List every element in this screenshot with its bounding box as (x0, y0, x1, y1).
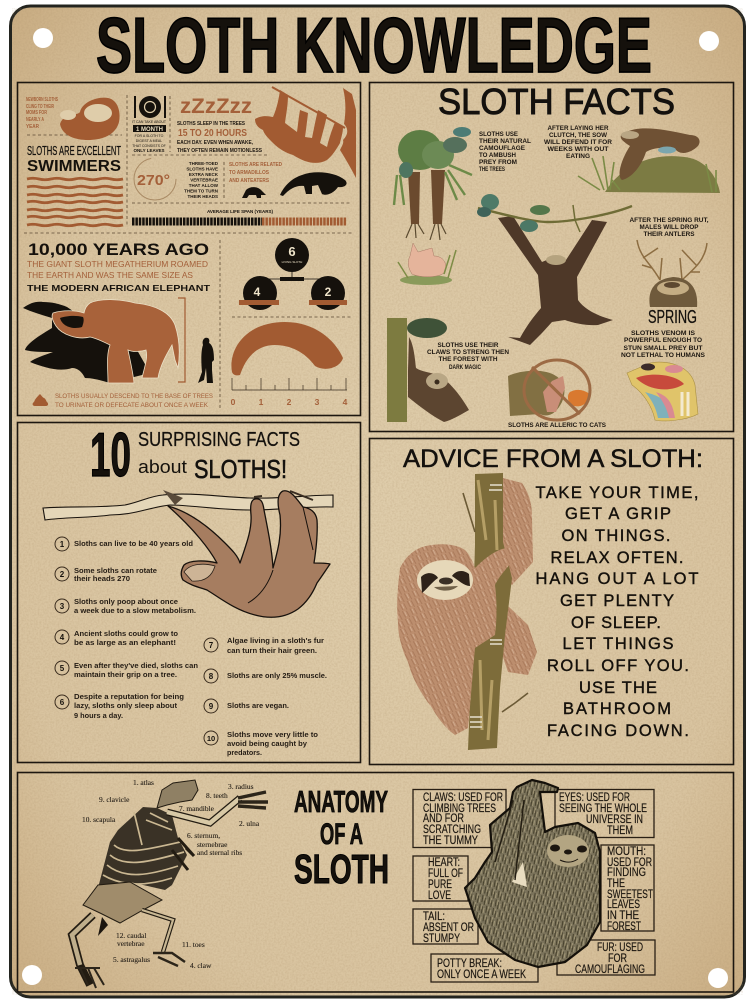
fact 6: Despite a reputation for being (74, 692, 184, 701)
illustration: elephant silhouette (52, 300, 179, 383)
text: newborn sloths: CLING TO THEIR (26, 104, 54, 110)
text: newborn sloths: YEAR (26, 124, 39, 130)
fact 4: Ancient sloths could grow to (74, 629, 178, 638)
heading: advice from a sloth: ADVICE FROM A SLOTH: (403, 445, 703, 473)
chart: species tree: 4 (254, 285, 261, 299)
claw tail (98, 917, 108, 936)
text: zzz sleep: zZzZzz (180, 95, 252, 118)
callout: claws: AND FOR (423, 813, 464, 825)
callout: mouth: IN THE (607, 910, 639, 922)
icon: armadillo (242, 187, 266, 198)
fact 3: a week due to a slow metabolism. (74, 606, 196, 615)
left hind leg (72, 915, 93, 985)
callout: potty break: POTTY BREAK: (437, 958, 502, 970)
text: neck vertebrae: SLOTHS HAVE (186, 166, 218, 172)
fact 9: Sloths are vegan. (227, 701, 289, 710)
callout: eyes: SEEING THE WHOLE (559, 803, 647, 815)
text: camouflage: THE TREES (479, 167, 505, 173)
text: one month to digest: FOR A SLOTH TO (135, 134, 164, 138)
skull (157, 780, 198, 808)
fact 1: Sloths can live to be 40 years old (74, 539, 193, 548)
text: sloth venom: SLOTHS VENOM IS (631, 331, 695, 337)
labels: skeleton parts: 7. mandible (179, 804, 215, 813)
illustration: sloth on tree (387, 318, 469, 422)
labels: skeleton parts: and sternal ribs (197, 848, 242, 857)
callout: heart: FULL OF (428, 868, 463, 880)
callout: fur: FUR: USED (597, 942, 643, 954)
text: related to armadillos (229, 162, 282, 184)
heading: swimmers (27, 143, 121, 175)
fact 7: 7 (209, 641, 214, 650)
fact 2: their heads 270 (74, 574, 130, 583)
callout: eyes: UNIVERSE IN (586, 814, 643, 826)
fact 5: Even after they've died, sloths can (74, 661, 198, 670)
claws (470, 485, 502, 727)
caption: allergic to cats: SLOTHS ARE ALLERIC TO CATS (508, 422, 606, 429)
text: newborn sloths: MOMS FOR (26, 110, 47, 116)
callout: claws: SCRATCHING (423, 824, 481, 836)
text: newborn sloths: NEWBORN SLOTHS (26, 97, 58, 103)
illustration: central hanging sloth (477, 194, 632, 345)
sloth body (397, 544, 512, 735)
heading: 10 surprising facts about sloths: SURPRISING FACTS (138, 429, 300, 451)
callout: heart: LOVE (428, 890, 451, 902)
height bracket (178, 298, 185, 382)
labels: skeleton parts: 5. astragalus (113, 955, 150, 964)
chart: 270 degree rotation: 270° (137, 172, 170, 189)
text: defending clutch: WILL DEFEND IT FOR (544, 140, 613, 146)
illustration: sloth skeleton (72, 780, 268, 988)
text: dropped antlers (630, 218, 709, 238)
hand (238, 792, 268, 808)
text: toilet habit: TO URINATE OR DEFECATE ABOUT ONCE A WEEK (55, 402, 209, 409)
list: facts 1 to 6 (55, 537, 198, 720)
text: defending clutch: WEEKS WITH OUT (548, 147, 609, 153)
text: advice list: FACING DOWN. (547, 722, 689, 740)
text: zzz sleep: THEY OFTEN REMAIN MOTIONLESS (177, 148, 262, 154)
text: one month to digest: IT CAN TAKE ABOUT (132, 120, 167, 124)
text: defending clutch: EATING (566, 154, 590, 160)
text: toilet habit: SLOTHS USUALLY DESCEND TO THE BASE OF TREES (55, 393, 214, 400)
text: advice list: BATHROOM (563, 700, 671, 718)
fact 7: Algae living in a sloth's fur (227, 636, 324, 645)
dashed dividers (24, 95, 352, 410)
labels: skeleton parts: 10. scapula (82, 815, 116, 824)
text: newborn sloths (26, 97, 58, 130)
fact 10: 10 (207, 734, 215, 743)
text: dropped antlers: AFTER THE SPRING RUT, (630, 218, 709, 224)
labels: skeleton parts: 1. atlas (133, 778, 154, 787)
callout: mouth: SWEETEST (607, 889, 653, 901)
callout: mouth: MOUTH: (607, 846, 646, 858)
fact 9: 9 (209, 702, 214, 711)
right hind leg (142, 910, 173, 952)
illustration: claw with ruler: 0 (231, 397, 236, 407)
text: neck vertebrae: THREE-TOED (189, 161, 219, 166)
icon: mother sloth and baby (60, 98, 120, 140)
chart: 270 degree rotation (134, 158, 176, 200)
heading: 10,000 years ago (27, 240, 211, 293)
callout: tail (423, 911, 474, 945)
fact 1 (55, 537, 193, 551)
labels: skeleton parts: 4. claw (190, 961, 212, 970)
fact 6 (55, 692, 184, 720)
text: advice list: RELAX OFTEN. (550, 549, 684, 567)
chart: average life span: AVERAGE LIFE SPAN (YEARS) (207, 209, 274, 214)
fact 9 (204, 699, 289, 713)
text: camouflage: THEIR NATURAL (479, 139, 531, 145)
callout: fur: FOR (608, 953, 627, 965)
text: neck vertebrae: VERTEBRAE (190, 178, 218, 182)
callout: mouth: FOREST (607, 921, 641, 933)
labels: skeleton parts: 3. radius (228, 782, 254, 791)
callout: heart: PURE (428, 879, 452, 891)
callout: heart: HEART: (428, 857, 460, 869)
heading: anatomy of a sloth: SLOTH (294, 846, 389, 892)
text: defending clutch (544, 126, 613, 160)
fact 10 (204, 730, 318, 757)
fact 7: can turn their hair green. (227, 646, 317, 655)
icon: poop (33, 394, 48, 406)
text: neck vertebrae: THEIR HEADS (187, 194, 218, 199)
icon: hanging sloth (255, 87, 356, 178)
fact 6: 6 (60, 698, 65, 707)
icon: plate and cutlery (134, 96, 166, 118)
text: advice list: LET THINGS (562, 635, 674, 653)
chart: species tree: LIVING SLOTH (282, 260, 302, 264)
text: advice list: OF SLEEP. (571, 614, 661, 632)
text: sloth venom: STUN SMALL PREY BUT (624, 346, 703, 352)
heading: swimmers: SWIMMERS (27, 158, 121, 175)
panel: 10 surprising facts (18, 421, 360, 762)
chart: species tree: 6 (288, 244, 296, 259)
illustration: pig (398, 243, 456, 285)
callout: eyes: THEM (607, 825, 633, 837)
back leg (500, 605, 537, 675)
text: dark magic: DARK MAGIC (449, 365, 482, 371)
callout: potty break: ONLY ONCE A WEEK (437, 969, 526, 981)
illustration: sloth on nest mound (578, 128, 720, 193)
text: zzz sleep: EACH DAY. EVEN WHEN AWAKE, (177, 140, 253, 146)
text: defending clutch: CLUTCH, THE SOW (549, 133, 607, 139)
text: related to armadillos: AND ANTEATERS (229, 178, 269, 184)
heading: anatomy of a sloth (294, 784, 389, 892)
illustration: anatomy of sloth head (627, 362, 698, 421)
fact 1: 1 (60, 540, 65, 549)
callout: heart (428, 857, 463, 902)
labels: skeleton parts: vertebrae (117, 939, 145, 948)
callout: claws (423, 792, 503, 847)
heading: 10,000 years ago: 10,000 YEARS AGO (28, 240, 209, 259)
callout: eyes (559, 792, 647, 837)
text: neck vertebrae: THEM TO TURN (184, 188, 218, 194)
sloth face (547, 835, 589, 867)
heading: 10 surprising facts about sloths: about (138, 456, 187, 477)
panel: sloth infographic (18, 82, 360, 416)
text: camouflage: PREY FROM (479, 160, 517, 166)
label: spring: SPRING (648, 307, 697, 327)
labels: skeleton parts: 2. ulna (239, 819, 260, 828)
illustration: antlered sloth (637, 240, 707, 307)
text: zzz sleep (177, 95, 262, 154)
fact 6: lazy, sloths only sleep about (74, 701, 177, 710)
fact 8: 8 (209, 672, 214, 681)
fact 3 (55, 597, 196, 615)
text: one month to digest: 1 MONTH (136, 127, 163, 133)
text: zzz sleep: SLOTHS SLEEP IN THE TREES (177, 121, 245, 127)
labels: skeleton parts: 9. clavicle (99, 795, 130, 804)
text: dark magic (427, 343, 509, 371)
text: dropped antlers: THEIR ANTLERS (644, 232, 694, 238)
pelvis (83, 882, 162, 923)
fact 7 (204, 636, 324, 655)
labels: skeleton parts: sternebrae (197, 840, 228, 849)
fact 10: predators. (227, 748, 262, 757)
illustration: hanging sloth (163, 490, 330, 617)
fact 8 (204, 669, 327, 683)
text: one month to digest: THAT CONSISTS OF (132, 144, 166, 148)
labels: skeleton parts: 11. toes (182, 940, 205, 949)
text: advice list: GET A GRIP (565, 505, 671, 523)
arm bones (167, 798, 240, 823)
tree trunk (463, 473, 528, 750)
text: sloth venom (621, 331, 705, 359)
callout: tail: ABSENT OR (423, 922, 474, 934)
fact 2: Some sloths can rotate (74, 566, 157, 575)
text: neck vertebrae: EXTRA NECK (189, 172, 219, 177)
callout: fur: CAMOUFLAGING (575, 964, 645, 976)
text: related to armadillos: TO ARMADILLOS (229, 170, 269, 176)
heading: 10,000 years ago: THE EARTH AND WAS THE SAME SIZE AS (27, 270, 193, 280)
callout: eyes: EYES: USED FOR (559, 792, 630, 804)
labels: skeleton parts: 12. caudal (116, 931, 146, 940)
text: advice list (536, 484, 698, 740)
panel: anatomy of a sloth (18, 772, 734, 992)
illustration: claw with ruler: 4 (343, 397, 348, 407)
illustration: claw with ruler: 2 (287, 397, 292, 407)
text: newborn sloths: NEARLY A (26, 117, 44, 123)
text: sloth venom: NOT LETHAL TO HUMANS (621, 353, 705, 359)
text: related to armadillos: SLOTHS ARE RELATED (229, 162, 282, 168)
callout: claws: THE TUMMY (423, 835, 478, 847)
text: one month to digest: DIGEST A MEAL (136, 139, 162, 143)
back arm (503, 478, 533, 585)
text: one month to digest: ONLY LEAVES (134, 148, 164, 153)
fact 5: maintain their grip on a tree. (74, 670, 177, 679)
panel: advice from a sloth (370, 438, 734, 764)
text: one month to digest (132, 120, 167, 153)
callout: mouth: FINDING (607, 867, 646, 879)
fact 3: Sloths only poop about once (74, 597, 178, 606)
text: advice list: ON THINGS. (562, 527, 670, 545)
text: camouflage (479, 132, 531, 173)
callout: tail: TAIL: (423, 911, 445, 923)
fact 6: 9 hours a day. (74, 711, 123, 720)
fact 3: 3 (60, 602, 65, 611)
fact 2: 2 (60, 570, 65, 579)
text: neck vertebrae (184, 161, 219, 199)
text: defending clutch: AFTER LAYING HER (548, 126, 609, 132)
text: advice list: HANG OUT A LOT (536, 570, 698, 588)
heading: anatomy of a sloth: OF A (320, 818, 363, 851)
callout: tail: STUMPY (423, 933, 460, 945)
callout: mouth: THE (607, 878, 625, 890)
text: sloth venom: POWERFUL ENOUGH TO (624, 338, 702, 344)
sloth face (417, 560, 473, 600)
text: zzz sleep: 15 TO 20 HOURS (178, 128, 247, 139)
heading: sloth facts: SLOTH FACTS (438, 81, 675, 122)
icon: anteater (280, 172, 347, 196)
callout: fur (575, 942, 645, 976)
illustration: claw with ruler (231, 322, 348, 407)
callout: mouth: LEAVES (607, 899, 640, 911)
text: advice list: TAKE YOUR TIME, (536, 484, 698, 502)
callout: claws: CLIMBING TREES (423, 803, 496, 815)
illustration: human silhouette (198, 338, 214, 383)
text: toilet habit (55, 393, 214, 409)
text: advice list: USE THE (579, 679, 657, 697)
heading: 10 surprising facts about sloths: SLOTHS! (194, 454, 287, 484)
illustration: photo style sloth (465, 780, 600, 967)
ribcage (98, 807, 194, 890)
icon: no cats symbol (508, 360, 590, 420)
list: facts 7 to 10 (204, 636, 327, 757)
labels: skeleton parts: 6. sternum, (187, 831, 220, 840)
fact 10: Sloths move very little to (227, 730, 318, 739)
text: advice list: GET PLENTY (560, 592, 674, 610)
heading: 10,000 years ago: THE MODERN AFRICAN ELEPHANT (27, 283, 211, 293)
panel: sloth facts (370, 81, 734, 432)
icon: water waves (27, 178, 123, 226)
illustration: claw with ruler: 3 (315, 397, 320, 407)
heading: 10 surprising facts about sloths: 10 (90, 421, 131, 490)
text: dark magic: THE FOREST WITH (438, 357, 498, 363)
text: camouflage: TO AMBUSH (479, 153, 516, 159)
heading: swimmers: SLOTHS ARE EXCELLENT (27, 143, 121, 158)
fact 2 (55, 566, 157, 583)
callout boxes (413, 790, 655, 982)
text: advice list: ROLL OFF YOU. (547, 657, 689, 675)
fact 8: Sloths are only 25% muscle. (227, 671, 327, 680)
fact 5 (55, 661, 198, 679)
illustration: claw with ruler: 1 (259, 397, 264, 407)
labels: skeleton parts (82, 778, 260, 970)
text: dropped antlers: MALES WILL DROP (640, 225, 698, 231)
illustration: branch (43, 494, 333, 520)
illustration: plant legged sloth (394, 127, 472, 240)
fact 10: avoid being caught by (227, 739, 308, 748)
callout: mouth (607, 846, 653, 933)
fact 4: be as large as an elephant! (74, 638, 176, 647)
fact 5: 5 (60, 664, 65, 673)
callout: claws: CLAWS: USED FOR (423, 792, 503, 804)
fact 4 (55, 629, 178, 647)
labels: skeleton parts: 8. teeth (206, 791, 228, 800)
callout: potty break (437, 958, 526, 981)
fact 4: 4 (60, 633, 65, 642)
text: neck vertebrae: THAT ALLOW (189, 183, 219, 188)
heading: 10 surprising facts about sloths (90, 421, 300, 490)
chart: species tree: 2 (325, 285, 332, 299)
text: dark magic: SLOTHS USE THEIR (438, 343, 499, 349)
text: dark magic: CLAWS TO STRENG THEN (427, 350, 509, 356)
illustration: sloth hugging tree (397, 473, 537, 750)
chart: species tree (239, 238, 347, 310)
text: camouflage: SLOTHS USE (479, 132, 518, 138)
text: camouflage: CAMOUFLAGE (479, 146, 525, 152)
heading: 10,000 years ago: THE GIANT SLOTH MEGATHERIUM ROAMED (27, 259, 208, 269)
heading: anatomy of a sloth: ANATOMY (294, 784, 388, 819)
callout: mouth: USED FOR (607, 857, 652, 869)
illustration: giant sloth silhouette (23, 302, 150, 383)
